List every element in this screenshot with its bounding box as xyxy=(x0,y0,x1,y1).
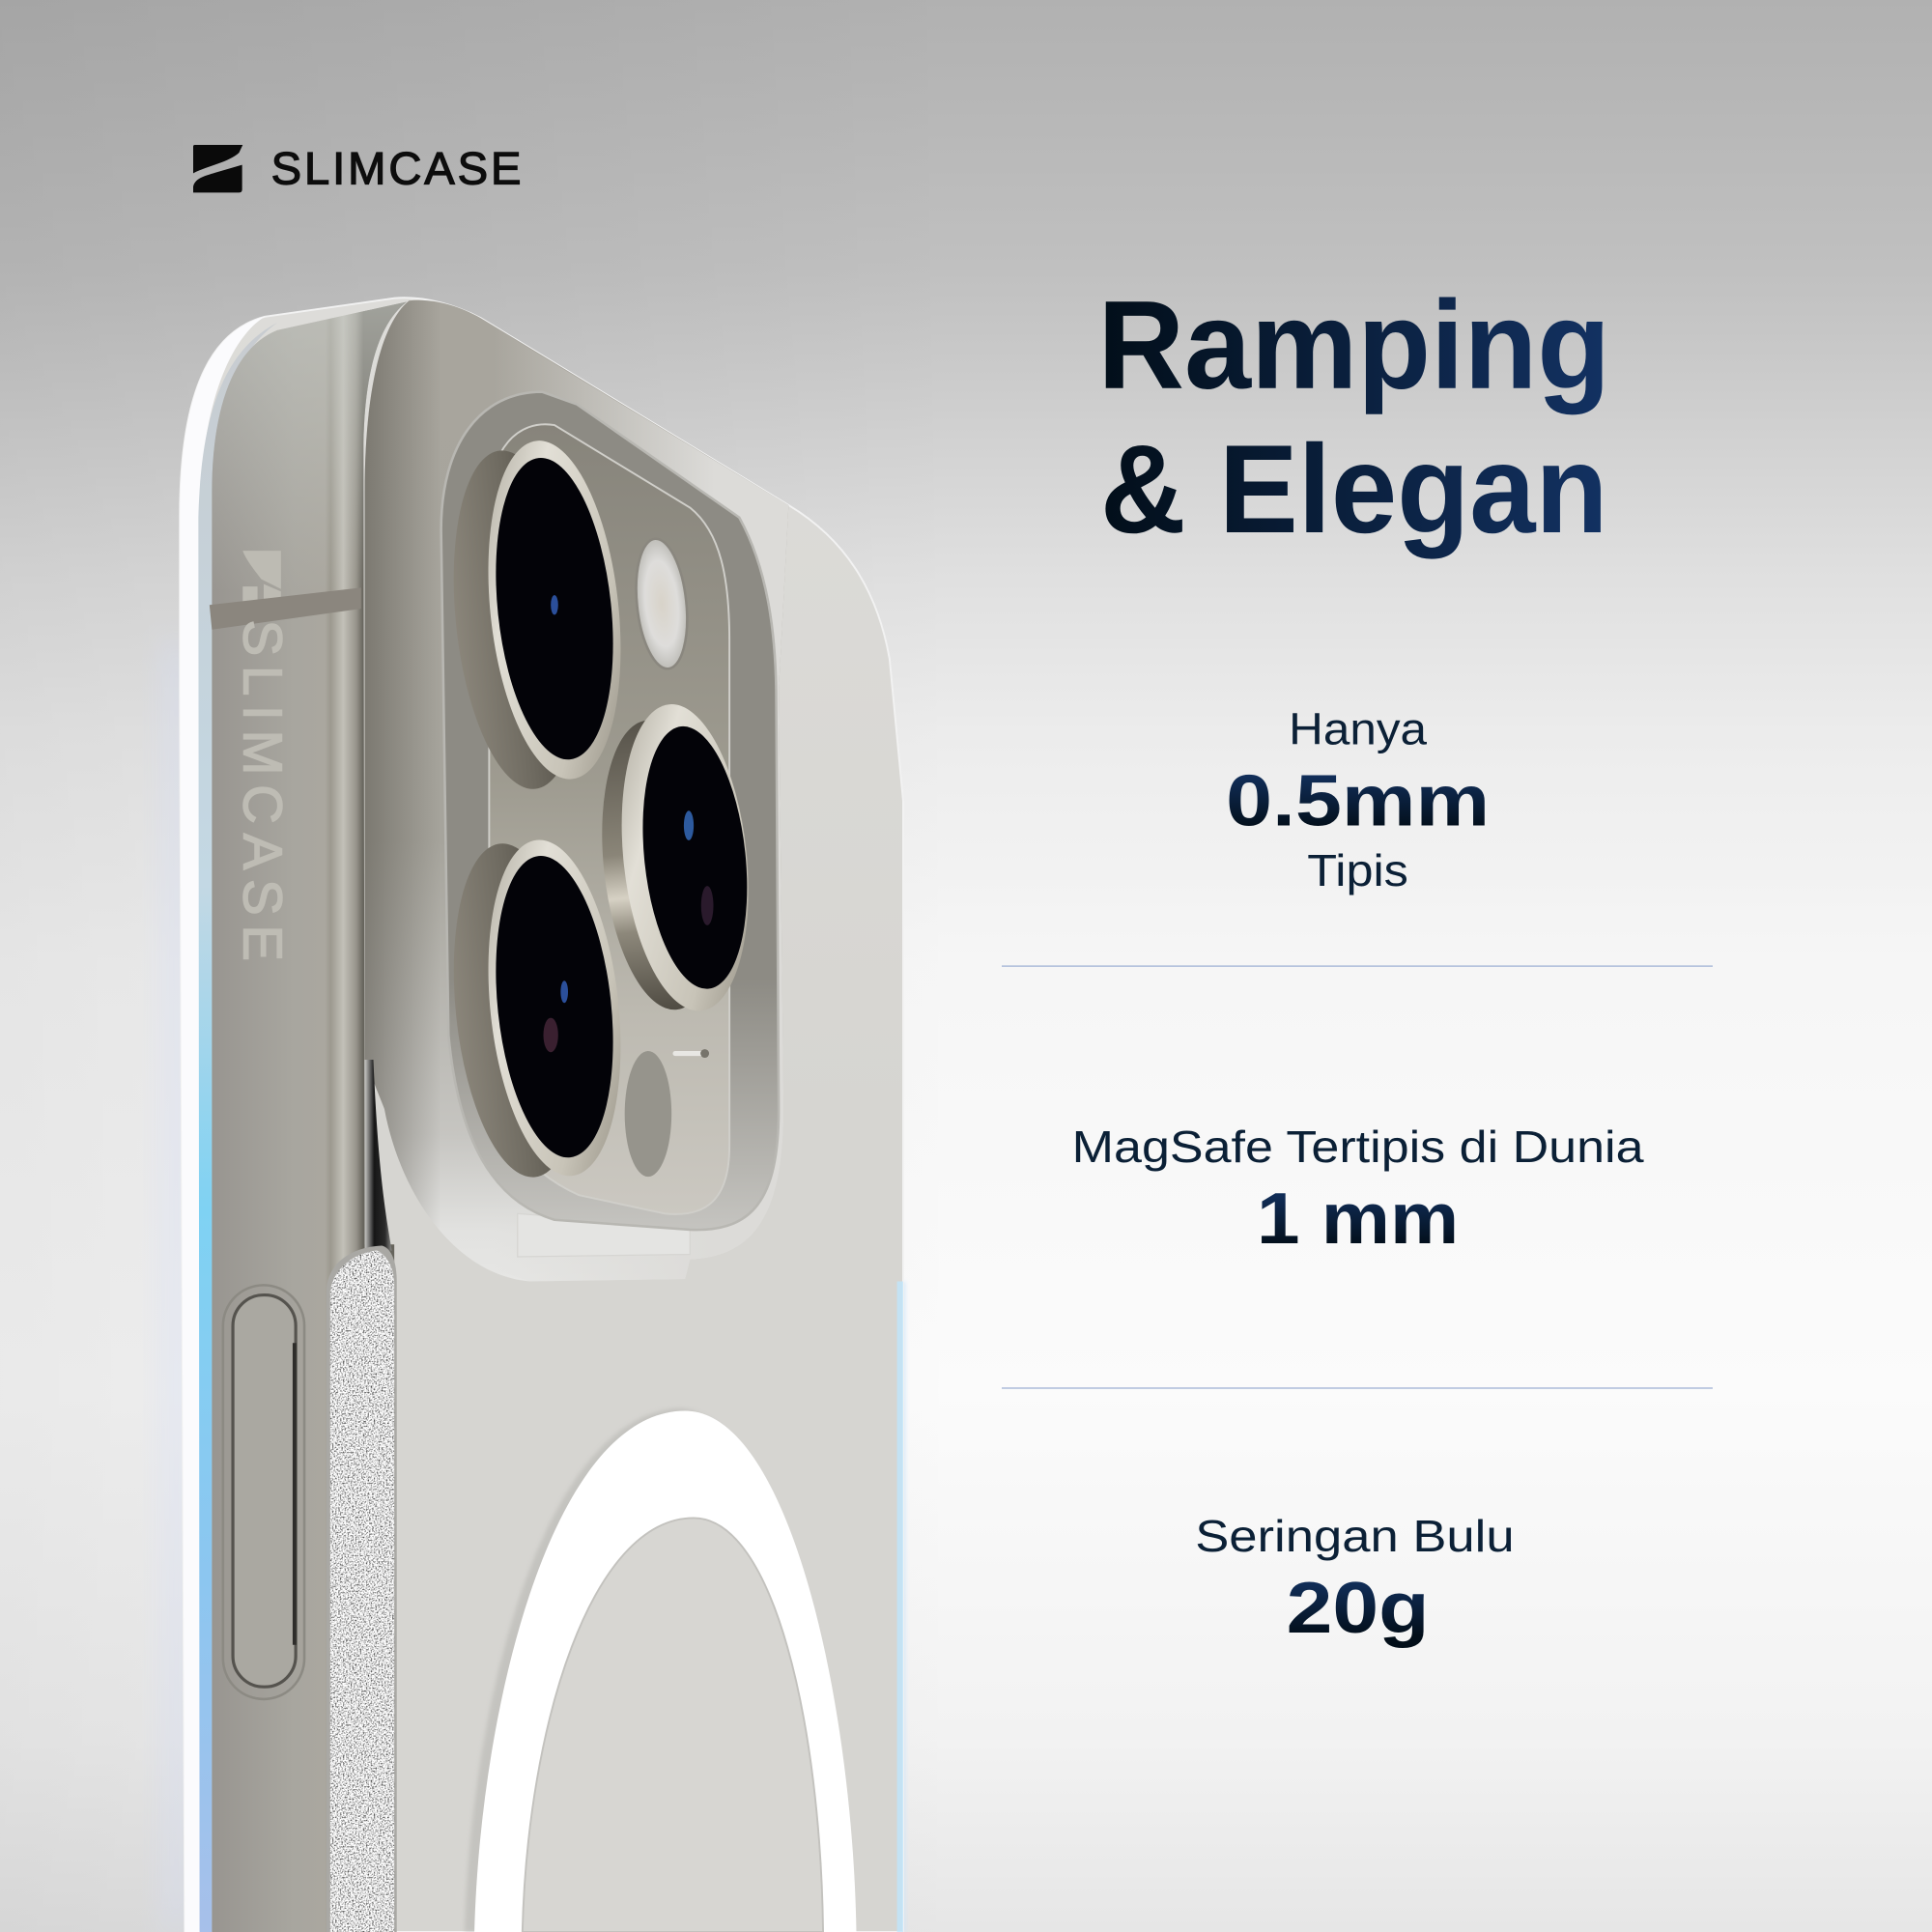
spec: thickness xyxy=(1226,703,1490,895)
logo mark xyxy=(193,145,242,192)
camera bump shoulder xyxy=(365,300,788,1282)
magsafe ring xyxy=(465,1408,856,1932)
phone with clear case xyxy=(165,298,906,1932)
iridescent edge strip xyxy=(198,323,277,1932)
brand logo xyxy=(193,144,522,195)
spec: thickness: Tipis xyxy=(1307,845,1408,895)
spec: weight: Seringan Bulu xyxy=(1195,1511,1515,1561)
spec: thickness: 0.5mm xyxy=(1226,760,1490,841)
clear camera frame xyxy=(441,392,779,1230)
divider xyxy=(1002,1387,1713,1389)
title: & Elegan xyxy=(1100,418,1608,559)
edge glow xyxy=(165,640,906,1932)
chrome gap xyxy=(365,1060,392,1251)
flash xyxy=(631,536,693,671)
lens: lower xyxy=(439,834,636,1183)
glitter textured strip xyxy=(327,1246,397,1932)
spec: thickness: Hanya xyxy=(1289,703,1428,753)
spec: magsafe xyxy=(1072,1122,1644,1259)
side band xyxy=(212,301,407,1932)
camera plateau xyxy=(489,424,729,1214)
side wordmark: SLIMCASE xyxy=(233,620,294,961)
title xyxy=(1097,274,1610,559)
lens: middle barrel and glass xyxy=(589,698,762,1017)
spec: magsafe: MagSafe Tertipis di Dunia xyxy=(1072,1122,1644,1172)
side button xyxy=(223,1285,304,1699)
microphone xyxy=(625,1051,671,1177)
title: Ramping xyxy=(1097,274,1610,415)
case silhouette xyxy=(180,298,903,1932)
wordmark: SLIMCASE xyxy=(271,144,522,195)
spec: magsafe: 1 mm xyxy=(1257,1178,1459,1259)
right edge light xyxy=(897,1282,903,1932)
side logo mark xyxy=(242,551,281,612)
spec: weight xyxy=(1195,1511,1515,1648)
bottom tab of clear frame xyxy=(518,1213,690,1257)
spec: weight: 20g xyxy=(1287,1567,1430,1648)
side band seam xyxy=(210,587,361,630)
divider xyxy=(1002,965,1713,967)
left clear edge xyxy=(180,317,265,1932)
sensor pin xyxy=(672,1049,709,1058)
lens: upper xyxy=(439,434,636,795)
